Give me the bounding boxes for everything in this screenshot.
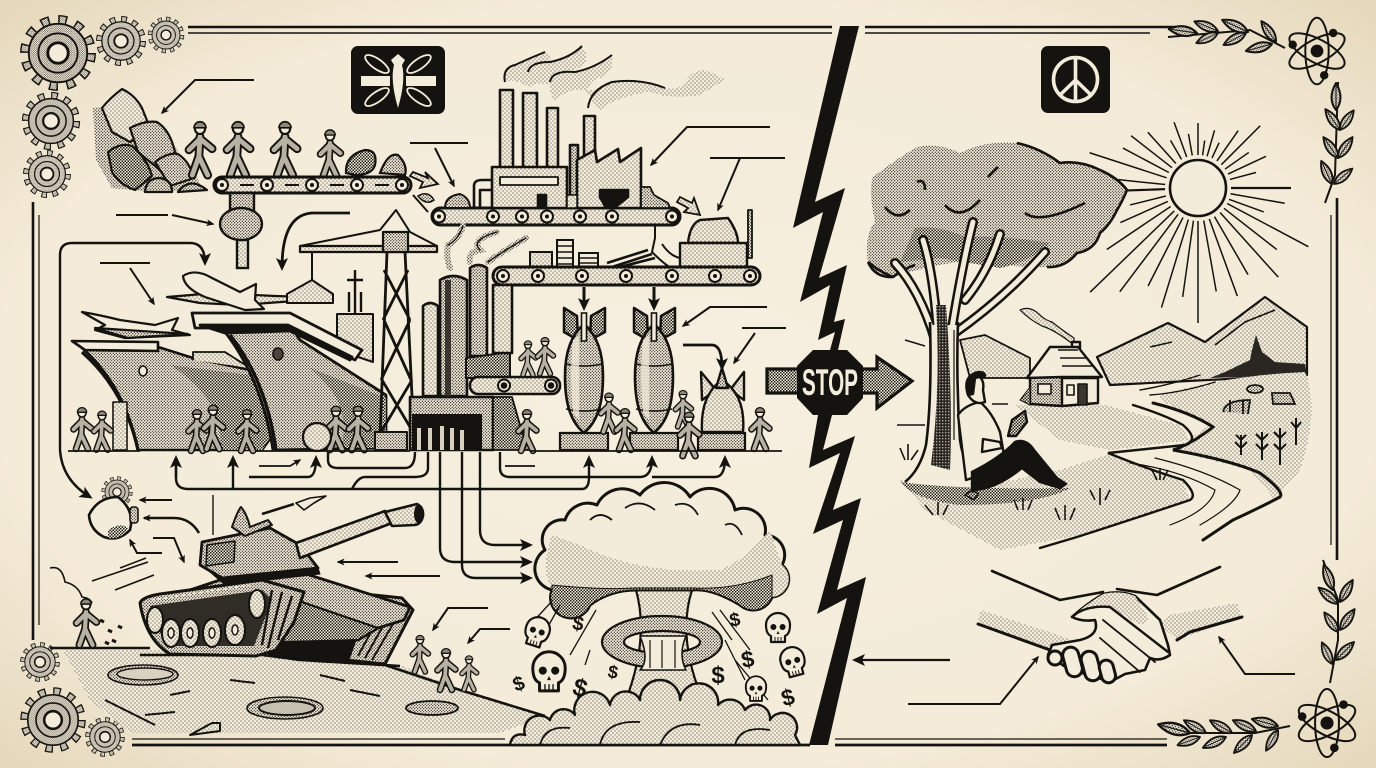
- ship two: [192, 270, 386, 450]
- blast ring: [602, 616, 722, 668]
- tree canopy: [867, 142, 1127, 277]
- corner gears: bottom left: [23, 645, 122, 754]
- tree branches: [895, 222, 1045, 340]
- stamping machine: [652, 210, 752, 267]
- laurel and atom: bottom right: [1157, 689, 1360, 757]
- cloud cap: [535, 483, 789, 618]
- blast skulls, dollars and rays: $: [728, 609, 742, 632]
- grass tufts: [897, 340, 1168, 520]
- blast skulls, dollars and rays: [510, 600, 808, 711]
- tank hull: [190, 565, 410, 640]
- tree: [867, 142, 1127, 482]
- tree trunk: [905, 325, 985, 482]
- right meadow: [1160, 372, 1311, 500]
- press machine: [220, 193, 262, 268]
- gear and rock target: [89, 478, 138, 538]
- icon: bomb with wings and atom orbits: [351, 46, 445, 114]
- tank left tread: [140, 580, 304, 656]
- factory smoke: [504, 46, 725, 110]
- ship one: [72, 341, 280, 450]
- falling material and factory arrows: [410, 172, 700, 215]
- lightning bolt divider: [793, 26, 866, 745]
- cloud stem: [624, 590, 705, 705]
- farm animals and crops: [1223, 385, 1301, 465]
- handshake: [978, 567, 1242, 684]
- tank right tread: [345, 592, 413, 664]
- stop arrow: [767, 350, 912, 415]
- cratered hill: [50, 648, 545, 735]
- laurel and atom: top right: [1168, 16, 1350, 84]
- sun: [1090, 122, 1308, 323]
- material stacks: [530, 240, 655, 268]
- soldiers on hill: [412, 635, 477, 690]
- house field: [1015, 405, 1190, 450]
- blast skulls, dollars and rays: $: [510, 672, 528, 697]
- workers on conveyor: [189, 122, 406, 176]
- blast skulls, dollars and rays: $: [711, 662, 725, 689]
- tank road wheels: [147, 590, 265, 647]
- factory: [474, 90, 670, 208]
- icon: peace sign: [1041, 46, 1110, 113]
- tank arrows: [130, 495, 510, 643]
- fighter jet: [82, 312, 190, 338]
- corner gears: top left: [25, 19, 182, 195]
- tank: [140, 496, 424, 664]
- laurel: right top: [1317, 82, 1357, 203]
- conveyor 2: [432, 194, 680, 225]
- panel: peaceful landscape: [855, 122, 1311, 704]
- house: [1020, 308, 1102, 406]
- conveyor 1: [214, 177, 411, 193]
- chimney stacks and furnace: [410, 265, 560, 450]
- tank turret: [200, 528, 318, 578]
- blast skulls, dollars and rays: $: [606, 661, 620, 683]
- river: [1040, 375, 1281, 548]
- warhead: [701, 368, 744, 432]
- handshake arrows: [855, 637, 1295, 704]
- rock quarry: [93, 89, 207, 192]
- panel: war machine: [50, 46, 808, 745]
- blast skulls, dollars and rays: $: [778, 683, 798, 711]
- stop arrow: STOP: [802, 362, 858, 403]
- man reading under tree: [900, 372, 1070, 505]
- laurel: right bottom: [1316, 560, 1358, 683]
- blast skulls, dollars and rays: $: [571, 612, 585, 636]
- process arrows lower loop: [176, 452, 725, 578]
- tank black underside: [268, 625, 362, 664]
- mountains: [960, 297, 1307, 385]
- blast skulls, dollars and rays: $: [570, 673, 591, 704]
- transport plane: [167, 272, 310, 310]
- base cloud: [510, 680, 800, 745]
- miner and dust left of tank: [50, 558, 154, 645]
- tank gunner: [232, 507, 272, 536]
- blast skulls, dollars and rays: $: [739, 645, 756, 673]
- tank main gun: [296, 511, 392, 558]
- shipyard crane: [287, 210, 437, 450]
- assembly floor line: [68, 450, 782, 452]
- furnace smoke: [447, 226, 526, 268]
- process arrows upper: [60, 80, 786, 497]
- conveyor 3: [493, 267, 760, 285]
- bombs: [560, 308, 745, 450]
- left ground: [900, 455, 1190, 550]
- assembly workers: [74, 337, 769, 456]
- mushroom cloud: [510, 483, 800, 745]
